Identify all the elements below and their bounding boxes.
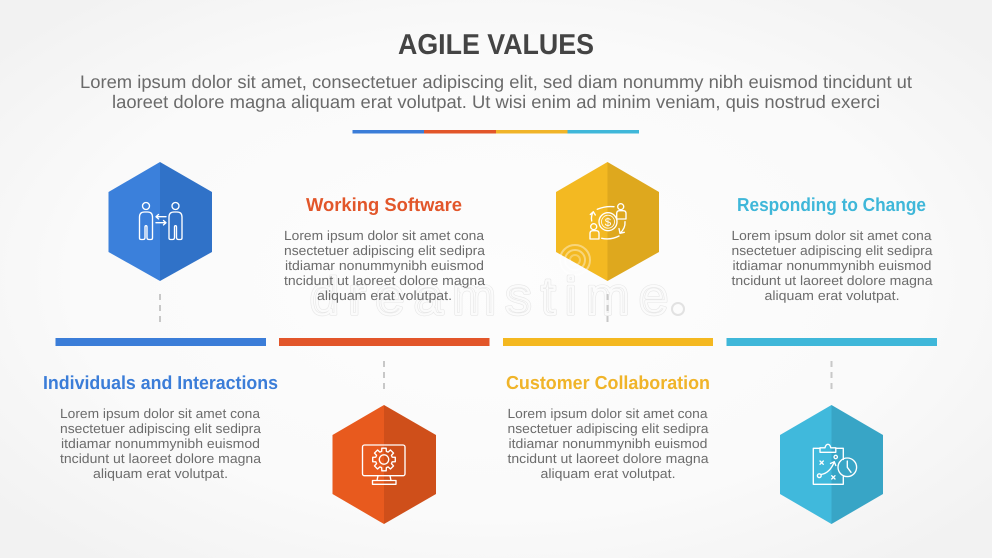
text block: individuals and interactions: Lorem ipsum dolor sit amet cona (60, 406, 261, 421)
subtitle text: Lorem ipsum dolor sit amet, consectetuer adipiscing elit, sed diam nonummy nibh euismod tincidunt ut (80, 72, 912, 92)
text block: working software: tncidunt ut laoreet dolore magna (284, 273, 486, 288)
timeline segment: blue (56, 338, 266, 346)
watermark: dreamstime (310, 268, 668, 326)
subtitle text (80, 72, 912, 112)
text block: customer collaboration: itdiamar nonummynibh euismod (508, 436, 708, 451)
timeline segment: orange (279, 338, 490, 346)
title: AGILE VALUES (398, 29, 594, 61)
panel: individuals and interactions hexagon (108, 162, 212, 281)
text block: responding to change: tncidunt ut laoreet dolore magna (732, 273, 933, 288)
text block: customer collaboration: aliquam erat volutpat. (540, 466, 676, 481)
watermark: dreamstime (310, 268, 668, 326)
dashed connector: orange hexagon (383, 361, 385, 393)
icon: money cycle with people: $ (605, 217, 612, 229)
text block: responding to change: nsectetuer adipiscing elit sedipra (732, 243, 933, 258)
icon: monitor with gear (362, 445, 405, 484)
dashed connector: yellow hexagon (606, 294, 608, 326)
panel: working software hexagon (332, 405, 436, 524)
text block: individuals and interactions: tncidunt ut laoreet dolore magna (60, 451, 262, 466)
timeline segment: yellow (503, 338, 713, 346)
icon: clipboard plan with clock (813, 444, 857, 484)
text block: working software: nsectetuer adipiscing elit sedipra (284, 243, 486, 258)
text block: individuals and interactions (43, 372, 278, 481)
panel: customer collaboration hexagon (556, 162, 659, 281)
text block: customer collaboration: tncidunt ut laoreet dolore magna (508, 451, 709, 466)
text block: customer collaboration: nsectetuer adipiscing elit sedipra (508, 421, 709, 436)
text block: responding to change: Responding to Change (737, 194, 926, 215)
text block: working software (284, 194, 486, 303)
text block: working software: Lorem ipsum dolor sit amet cona (284, 228, 485, 243)
text block: customer collaboration: Customer Collaboration (506, 372, 710, 393)
text block: responding to change: itdiamar nonummynibh euismod (732, 258, 932, 273)
dashed connector: blue hexagon (159, 294, 161, 326)
watermark rings over yellow hexagon (560, 245, 590, 275)
text block: responding to change (732, 194, 933, 303)
text block: individuals and interactions: itdiamar nonummynibh euismod (61, 436, 260, 451)
panel: responding to change hexagon (780, 405, 883, 524)
icon: two people exchanging (140, 202, 182, 240)
text block: responding to change: aliquam erat volutpat. (764, 288, 900, 303)
text block: working software: Working Software (306, 194, 462, 215)
text block: individuals and interactions: aliquam erat volutpat. (93, 466, 228, 481)
text block: individuals and interactions: nsectetuer adipiscing elit sedipra (60, 421, 262, 436)
dashed connector: cyan hexagon (830, 361, 832, 393)
text block: working software: aliquam erat volutpat. (317, 288, 452, 303)
text block: responding to change: Lorem ipsum dolor sit amet cona (732, 228, 932, 243)
text block: individuals and interactions: Individuals and Interactions (43, 372, 278, 393)
text block: working software: itdiamar nonummynibh euismod (285, 258, 484, 273)
subtitle text: laoreet dolore magna aliquam erat volutpat. Ut wisi enim ad minim veniam, quis nostrud exerci (112, 92, 880, 112)
text block: customer collaboration: Lorem ipsum dolor sit amet cona (508, 406, 708, 421)
timeline segment: cyan (726, 338, 937, 346)
title divider: four colour bar (352, 130, 639, 134)
text block: customer collaboration (506, 372, 710, 481)
